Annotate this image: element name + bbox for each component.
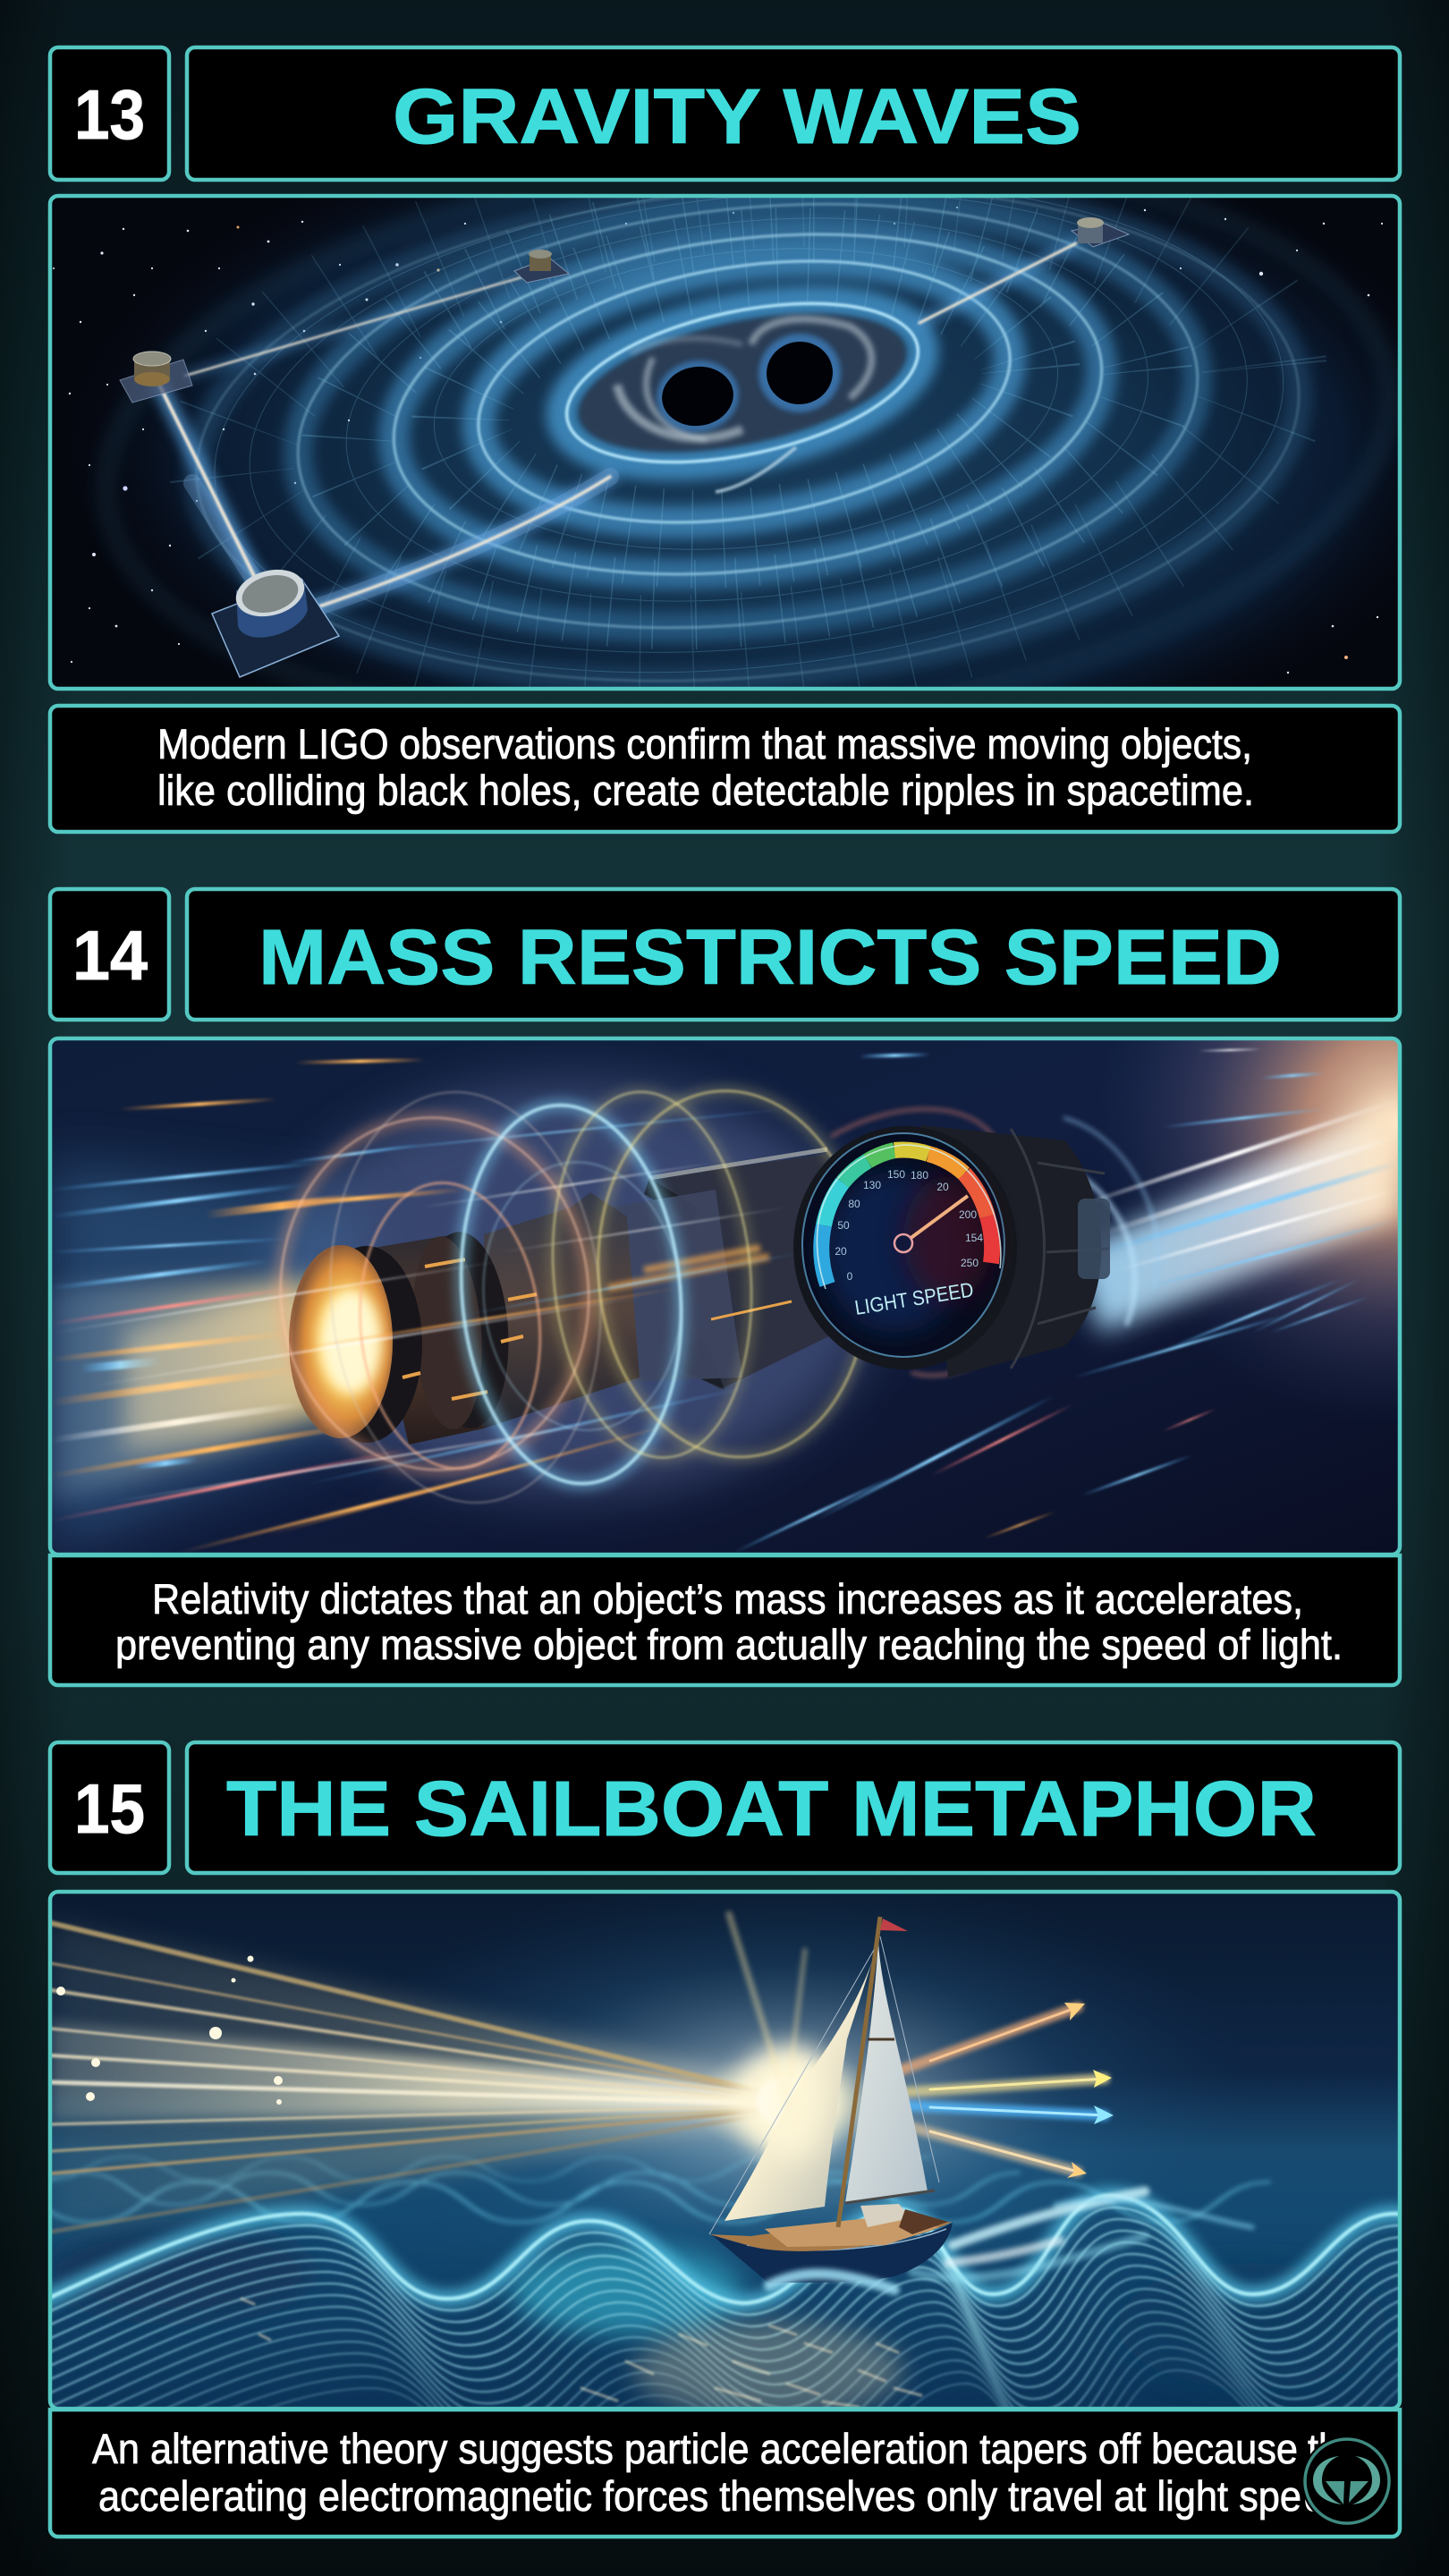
caption: relativity (50, 1555, 1400, 1685)
section 13: gravity waves (50, 47, 1414, 832)
beams and haze (268, 1082, 877, 1494)
speed gauge: LIGHT SPEED (853, 1277, 975, 1319)
caption: alternative theory: ed. (1304, 2472, 1349, 2520)
ocean waves (0, 2157, 1449, 2522)
speed gauge: 200 (959, 1208, 977, 1221)
title: mass restricts speed (187, 889, 1400, 1020)
illustration panel: black hole ripples and LIGO detector (48, 193, 1402, 691)
speed gauge: 80 (848, 1198, 860, 1210)
title: gravity waves (187, 47, 1400, 180)
bow splash (769, 2274, 894, 2290)
black holes (576, 311, 909, 496)
title: the sailboat metaphor (187, 1742, 1400, 1873)
illustration panel: sailboat pushed by light on electromagnetic waves (0, 1892, 1449, 2522)
logo badge (1301, 2436, 1393, 2527)
illustration panel: accelerating craft with light speed gauge (50, 1038, 1400, 1555)
craft body (289, 1149, 836, 1445)
caption: LIGO observations: like colliding black holes, create detectable ripples in spacetime. (157, 767, 1254, 814)
converging light beam (51, 1914, 843, 2236)
speed gauge: 130 (863, 1179, 881, 1191)
boat wake foam (912, 2191, 1252, 2277)
title: gravity waves: GRAVITY WAVES (393, 73, 1081, 160)
gauge colour arc (821, 1149, 992, 1284)
caption: LIGO observations: Modern LIGO observations confirm that massive moving objects, (157, 720, 1252, 767)
speed gauge (793, 1126, 1017, 1369)
section 14: mass restricts speed (50, 889, 1400, 1685)
speed gauge: 20 (936, 1181, 949, 1193)
caption: relativity: Relativity dictates that an object’s mass increases as it accelerates, (152, 1575, 1303, 1623)
number box 14 (50, 889, 169, 1020)
speed gauge: 154 (965, 1232, 983, 1244)
detectors (120, 217, 1129, 677)
thin streaks over craft (54, 1109, 805, 1503)
number box 15: 15 (74, 1769, 145, 1848)
number box 15 (50, 1742, 169, 1873)
caption: alternative theory: the (1308, 2425, 1361, 2472)
number box 13: 13 (74, 75, 145, 154)
caption: alternative theory (50, 2410, 1400, 2537)
stars (53, 207, 1414, 674)
caption: relativity: preventing any massive object from actually reaching the speed of light. (115, 1621, 1343, 1668)
speed gauge: 0 (847, 1270, 853, 1283)
force arrows (883, 2007, 1105, 2172)
speed gauge: 250 (961, 1257, 979, 1269)
laser arms (159, 243, 1076, 610)
golden light reflection on water (635, 2321, 903, 2419)
grid lines (170, 198, 1326, 687)
craft rear section behind gauge (921, 1125, 1101, 1377)
number box 13 (50, 47, 169, 180)
caption: alternative theory: accelerating electromagnetic forces themselves only travel at light spe (98, 2472, 1301, 2520)
wave rings (95, 198, 1397, 687)
speed gauge: 180 (911, 1169, 928, 1182)
caption: alternative theory: An alternative theory suggests particle acceleration tapers off because (92, 2425, 1298, 2472)
title: the sailboat metaphor: THE SAILBOAT METAPHOR (226, 1766, 1317, 1852)
section 15: the sailboat metaphor (0, 1742, 1449, 2537)
sailboat (709, 1917, 953, 2284)
speed gauge: 20 (835, 1245, 847, 1258)
caption: LIGO observations (50, 706, 1400, 832)
speed gauge: 50 (837, 1219, 850, 1232)
energy rings (264, 1057, 885, 1519)
number box 14: 14 (72, 916, 148, 995)
bright wave arcs (832, 1109, 1157, 1376)
title: mass restricts speed: MASS RESTRICTS SPEED (258, 914, 1282, 1001)
streaks (51, 1049, 1399, 1553)
speed gauge: 150 (887, 1168, 905, 1181)
